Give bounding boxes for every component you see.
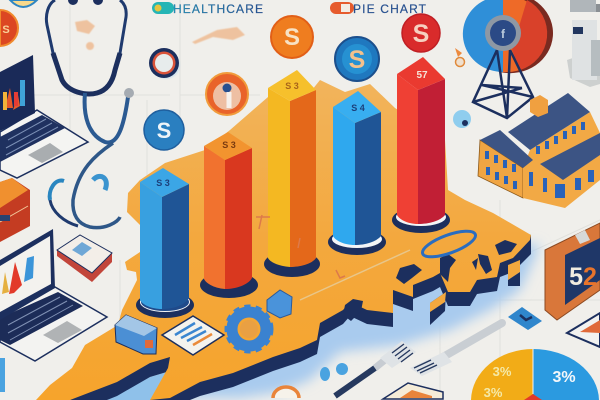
coin blue red S xyxy=(335,37,379,81)
bar: red xyxy=(392,57,450,233)
bar: blue tall xyxy=(328,91,386,255)
roof main xyxy=(508,93,590,150)
stethoscope chest piece lens xyxy=(149,48,180,79)
laptop screen xyxy=(0,55,35,131)
coin blue S: S xyxy=(157,118,171,143)
map dark coast blotches xyxy=(343,240,517,321)
stethoscope end piece xyxy=(124,88,134,98)
book stack xyxy=(57,235,112,282)
laptop trackpad xyxy=(43,321,82,343)
laptop top-left xyxy=(0,55,88,178)
suitcase with 52 xyxy=(545,223,600,320)
stethoscope xyxy=(46,0,134,228)
laptop base xyxy=(0,110,88,178)
bar: blue short: S 3 xyxy=(156,178,170,188)
small blue droplet xyxy=(453,110,471,128)
report sheet xyxy=(162,316,224,355)
laptop lower-left xyxy=(0,229,107,361)
laptop screen xyxy=(0,229,55,320)
fork 2 xyxy=(410,323,502,376)
small blue dots xyxy=(320,363,348,381)
bar chart xyxy=(136,57,450,318)
coin red S: S xyxy=(413,20,429,48)
faint orange sketches xyxy=(75,20,245,50)
blue ring on map xyxy=(420,226,478,262)
pie chart: 3% xyxy=(552,369,576,386)
windows xyxy=(485,122,594,198)
bar: orange: S 3 xyxy=(222,140,236,150)
laptop keyboard xyxy=(0,115,65,162)
island east xyxy=(508,260,520,280)
laptop trackpad xyxy=(28,143,63,163)
small blue box xyxy=(267,290,292,318)
bar: orange xyxy=(200,132,258,298)
building xyxy=(478,93,600,208)
laptop keyboard xyxy=(0,292,83,345)
map top surface xyxy=(36,80,531,400)
coin blue red S: S xyxy=(349,46,365,74)
island south xyxy=(430,292,446,325)
coin blue S xyxy=(144,110,184,150)
pie disc xyxy=(467,0,553,73)
roof right wing xyxy=(540,133,600,180)
map side wall xyxy=(70,200,531,400)
bar: blue tall: S 4 xyxy=(351,103,365,113)
coin orange S: S xyxy=(284,24,300,51)
pie chart xyxy=(471,349,599,400)
laptop base xyxy=(0,287,107,361)
coin orange S xyxy=(271,16,313,58)
fork 1 xyxy=(335,341,416,396)
bar: blue short xyxy=(136,168,194,318)
pie chart: 3% xyxy=(484,385,503,400)
suitcase with 52: 52 xyxy=(569,263,597,291)
slice yellow xyxy=(471,349,533,400)
left bottom blue figure xyxy=(0,358,5,392)
screen chart xyxy=(2,272,9,294)
roof left wing xyxy=(480,130,533,168)
map of region xyxy=(36,80,540,400)
blue card xyxy=(508,307,542,330)
bottom gear xyxy=(273,387,299,398)
slice blue xyxy=(533,349,599,400)
bar: yellow xyxy=(264,70,320,277)
wall main xyxy=(523,112,600,208)
tablet right xyxy=(567,313,600,347)
top-left coin: S xyxy=(2,24,10,36)
small marks xyxy=(256,215,410,300)
water inlet xyxy=(107,371,170,400)
lighthouse xyxy=(567,0,600,87)
gear xyxy=(227,307,271,351)
coin orange info xyxy=(206,73,248,115)
orange case left xyxy=(0,178,30,242)
tower with pie disc xyxy=(463,0,553,118)
heading: healthcare: HEALTHCARE xyxy=(173,2,263,16)
pie labels: 3% xyxy=(493,364,512,379)
bar: red: 57 xyxy=(416,70,428,81)
stethoscope ear tips xyxy=(68,0,103,5)
bottom tablet xyxy=(383,383,443,399)
tower lens xyxy=(485,15,521,51)
bar: yellow: S 3 xyxy=(285,81,299,91)
top-left coin xyxy=(0,0,37,46)
box device xyxy=(115,315,157,354)
tower legs xyxy=(473,50,533,118)
coin red S xyxy=(402,14,440,52)
tower with pie disc: f xyxy=(501,27,506,41)
slice red xyxy=(524,394,542,400)
heading: pie chart: PIE CHART xyxy=(353,2,427,16)
small orange tag xyxy=(455,48,464,66)
chimney xyxy=(530,95,548,117)
wall left wing xyxy=(478,140,523,198)
